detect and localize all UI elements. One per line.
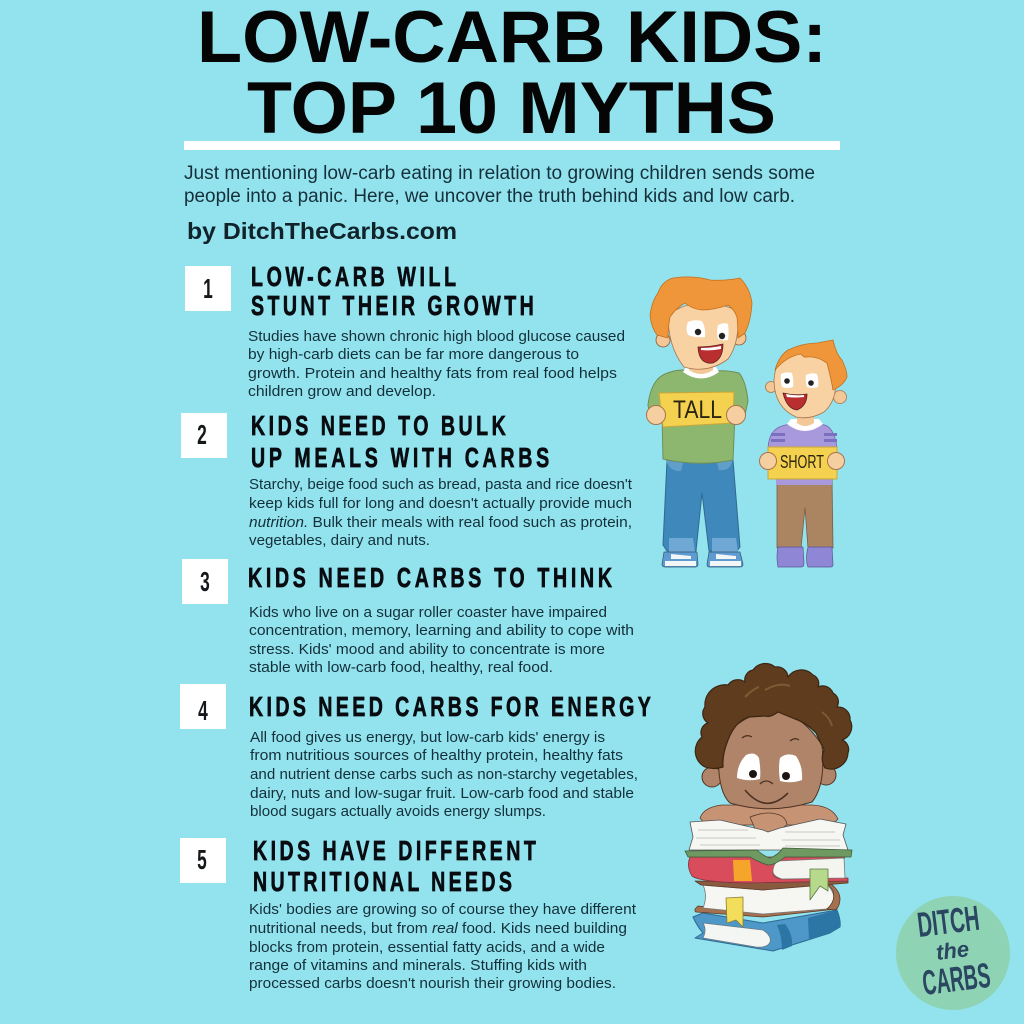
illustration: short boy	[760, 340, 847, 567]
body 1: by high-carb diets can be far more dangerous to	[248, 346, 579, 363]
body 1: growth. Protein and healthy fats from real food helps	[248, 365, 617, 382]
body 5: range of vitamins and minerals. Stuffing kids with	[249, 957, 587, 974]
body 5: Kids' bodies are growing so of course they have different	[249, 901, 637, 918]
body 2: nutrition. Bulk their meals with real food such as protein,	[249, 514, 632, 531]
heading 2: UP MEALS WITH CARBS	[251, 443, 549, 474]
logo badge: DITCH	[915, 899, 982, 945]
body 3: concentration, memory, learning and ability to cope with	[249, 622, 634, 639]
heading 1: STUNT THEIR GROWTH	[251, 291, 534, 322]
number badge 5	[180, 838, 226, 883]
body 1	[248, 328, 625, 400]
heading 1	[251, 262, 534, 322]
SHORT sign: SHORT	[780, 452, 824, 472]
heading 5: KIDS HAVE DIFFERENT	[253, 836, 536, 867]
body 3: stress. Kids' mood and ability to concentrate is more	[249, 641, 605, 658]
byline: by DitchTheCarbs.com	[187, 218, 457, 244]
title underline	[184, 141, 840, 150]
illustration: tall boy	[646, 277, 752, 567]
body 3: stable with low-carb food, healthy, real food.	[249, 659, 553, 676]
heading 1: LOW-CARB WILL	[251, 262, 456, 293]
body 1: children grow and develop.	[248, 383, 436, 400]
number badge 2	[181, 413, 227, 458]
body 2	[249, 476, 633, 549]
heading 2: KIDS NEED TO BULK	[251, 411, 506, 442]
body 4: dairy, nuts and low-sugar fruit. Low-carb food and stable	[250, 785, 634, 802]
myth 4	[180, 684, 651, 820]
number badge 5: 5	[197, 844, 207, 875]
title: TOP 10 MYTHS	[247, 68, 776, 149]
logo badge: the	[935, 936, 970, 965]
logo badge	[896, 896, 1010, 1010]
body 5: nutritional needs, but from real food. Kids need building	[249, 920, 627, 937]
number badge 2: 2	[197, 419, 207, 450]
myth 1	[185, 262, 625, 400]
body 3: Kids who live on a sugar roller coaster have impaired	[249, 604, 607, 621]
myth 2	[181, 411, 633, 549]
intro text	[184, 163, 815, 207]
body 5	[249, 901, 637, 992]
heading 5	[253, 836, 536, 898]
body 4: All food gives us energy, but low-carb kids' energy is	[250, 729, 605, 746]
number badge 4	[180, 684, 226, 729]
number badge 1: 1	[203, 273, 213, 304]
number badge 4: 4	[198, 695, 208, 726]
myth 3	[182, 559, 634, 676]
intro text: people into a panic. Here, we uncover the truth behind kids and low carb.	[184, 186, 795, 207]
myth 5	[180, 836, 637, 992]
book stack	[685, 819, 852, 951]
body 5: processed carbs doesn't nourish their growing bodies.	[249, 975, 616, 992]
number badge 3: 3	[200, 566, 210, 597]
heading 4: KIDS NEED CARBS FOR ENERGY	[249, 692, 651, 723]
heading 2	[251, 411, 549, 474]
body 4: and nutrient dense carbs such as non-starchy vegetables,	[250, 766, 638, 783]
body 2: vegetables, dairy and nuts.	[249, 532, 430, 549]
body 4	[250, 729, 638, 820]
number badge 1	[185, 266, 231, 311]
TALL sign	[659, 392, 734, 427]
body 2: keep kids full for long and doesn't actually provide much	[249, 495, 632, 512]
body 3	[249, 604, 634, 676]
body 4: blood sugars actually avoids energy slumps.	[250, 803, 546, 820]
illustration: child with books	[685, 663, 852, 951]
SHORT sign	[768, 447, 837, 479]
number badge 3	[182, 559, 228, 604]
heading 5: NUTRITIONAL NEEDS	[253, 867, 512, 898]
title	[197, 0, 827, 149]
body 1: Studies have shown chronic high blood glucose caused	[248, 328, 625, 345]
body 2: Starchy, beige food such as bread, pasta and rice doesn't	[249, 476, 633, 493]
TALL sign: TALL	[673, 396, 722, 424]
body 5: blocks from protein, essential fatty acids, and a wide	[249, 939, 605, 956]
heading 3: KIDS NEED CARBS TO THINK	[248, 563, 612, 594]
intro text: Just mentioning low-carb eating in relation to growing children sends some	[184, 163, 815, 184]
body 4: from nutritious sources of healthy protein, healthy fats	[250, 747, 623, 764]
